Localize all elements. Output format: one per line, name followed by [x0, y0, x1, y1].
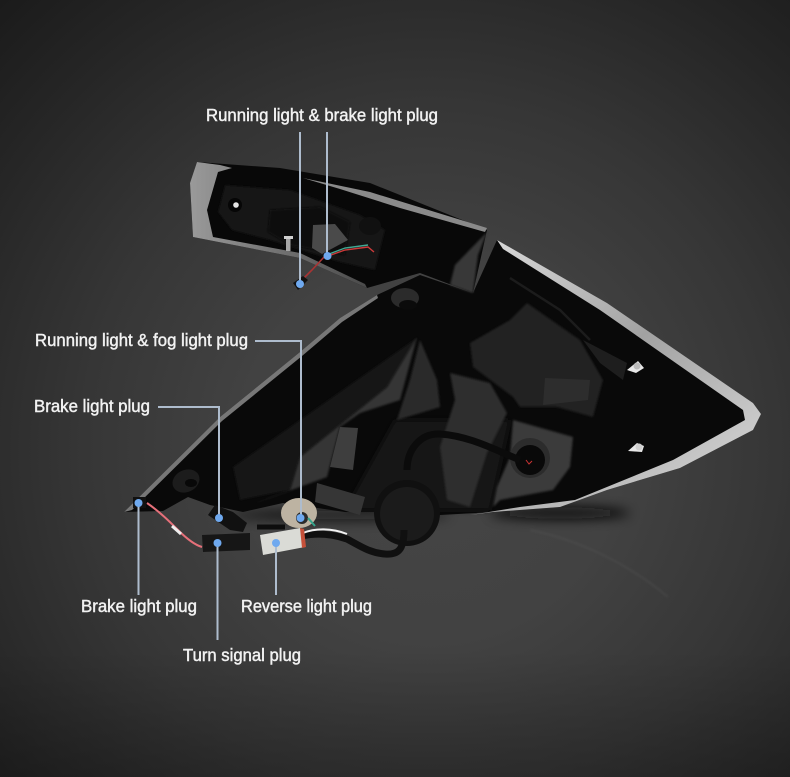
- red seal: [300, 528, 306, 548]
- reverse connector: [260, 528, 305, 555]
- label: brake light plug, upper: Brake light plug: [34, 396, 150, 416]
- label: running light and brake light plug: Running light & brake light plug: [206, 105, 438, 125]
- inner cavity: [218, 185, 385, 270]
- housing body: [124, 240, 761, 515]
- upper lamp body: [190, 162, 487, 293]
- grey upper panel: [397, 340, 440, 420]
- green wire: [308, 518, 315, 526]
- grey socket panel: [493, 420, 573, 507]
- label: running light and fog light plug: Running light & fog light plug: [35, 330, 248, 350]
- silver rim, left edge: [124, 295, 378, 512]
- rubber grommet: [374, 480, 440, 546]
- tail light: lower lamp housing: [124, 240, 761, 515]
- black wire behind: [257, 524, 285, 530]
- grey left plane: [237, 337, 417, 510]
- floor reflection: [530, 530, 668, 597]
- circuit board: [312, 224, 348, 254]
- small wire joint: [172, 526, 181, 534]
- grey lens corner: [190, 162, 367, 288]
- lower plate: [315, 483, 365, 515]
- upper bolt: [627, 361, 644, 373]
- tail light: upper lamp: [190, 162, 487, 293]
- grommet: [359, 217, 381, 235]
- socket at center: [510, 438, 550, 478]
- lower bolt: [628, 443, 644, 452]
- center plate: [470, 303, 603, 417]
- red and white left wire: [147, 503, 202, 547]
- silver rim, right edge: [470, 240, 761, 515]
- wire bundle: [300, 245, 374, 282]
- upper rim dark strip: [510, 278, 590, 340]
- harness to socket: [407, 434, 520, 470]
- black cable: [302, 530, 404, 554]
- top silver rim: [303, 178, 487, 232]
- small plug: [293, 276, 308, 290]
- label patch on plate: [543, 378, 590, 405]
- callout dots: [134, 252, 332, 547]
- wiring harness: [133, 434, 520, 555]
- mounting post, lower left: [169, 465, 203, 497]
- screw: [284, 236, 293, 251]
- bulb socket: [281, 498, 317, 528]
- lower base shading: [345, 420, 510, 510]
- white wire: [303, 529, 347, 534]
- label: turn signal plug: Turn signal plug: [183, 645, 301, 665]
- left plug: [133, 497, 146, 508]
- floor shadow: [230, 507, 630, 520]
- callout lines: [138, 132, 327, 640]
- mounting post, upper: [391, 288, 419, 310]
- bracket strip: [583, 340, 627, 380]
- turn signal connector: [202, 533, 250, 552]
- foam strip: [233, 337, 418, 500]
- label: brake light plug, lower: Brake light plug: [81, 596, 197, 616]
- label: reverse light plug: Reverse light plug: [241, 596, 372, 616]
- light patch: [330, 427, 358, 470]
- grey center panel: [440, 373, 507, 507]
- brake connector: [208, 505, 247, 532]
- stud: [228, 198, 242, 212]
- tip facet: [450, 232, 487, 293]
